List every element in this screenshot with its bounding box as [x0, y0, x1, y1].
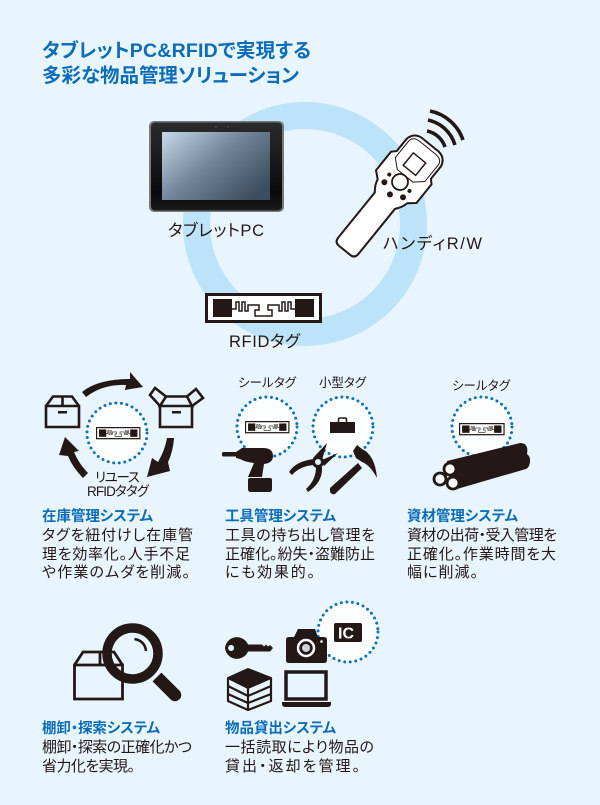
description: 理を効率化。人手不足	[42, 546, 190, 563]
description: 正確化。紛失・盗難防止	[225, 546, 375, 563]
description: 貸出・返却を管理。	[225, 757, 360, 775]
description	[225, 739, 374, 775]
small RFID tag	[246, 422, 289, 433]
tag circle	[87, 403, 147, 463]
icon: hammer	[330, 445, 377, 494]
label: seal tag: シールタグ	[452, 379, 510, 393]
tag circle	[452, 397, 512, 457]
icon: pipes	[434, 443, 530, 489]
heading: 棚卸・探索システム	[42, 719, 160, 737]
icon: key	[225, 637, 273, 659]
description	[42, 526, 193, 581]
icon: small tag case	[330, 418, 355, 433]
icon: RFID tag	[206, 294, 320, 322]
icon: handheld reader	[324, 111, 463, 267]
label: reuse tag: リユース	[95, 470, 140, 485]
description: 一括読取により物品の	[225, 739, 374, 756]
description: 幅に削減。	[407, 564, 478, 581]
description	[407, 526, 557, 581]
icon: pliers	[289, 443, 338, 492]
title	[42, 39, 311, 87]
description: タグを紐付けし在庫管	[42, 526, 193, 544]
panel: inventory management	[42, 372, 203, 581]
small RFID tag	[97, 428, 140, 439]
label: small tag: 小型タグ	[319, 376, 366, 390]
panel: item lending	[225, 602, 378, 775]
title: 多彩な物品管理ソリューション	[42, 64, 299, 87]
label: RFID tag: RFIDタグ	[229, 332, 301, 351]
ring behind devices	[196, 116, 414, 332]
icon: magnifier	[107, 628, 181, 701]
icon: tablet PC	[149, 121, 284, 212]
heading: 工具管理システム	[225, 507, 336, 525]
icon: IC badge	[334, 623, 362, 642]
heading: 在庫管理システム	[42, 507, 153, 525]
arrow: right	[147, 438, 174, 477]
icon: books	[228, 669, 271, 710]
panel: material management	[407, 379, 557, 581]
label: tablet PC: タブレットPC	[168, 220, 264, 240]
description	[42, 739, 192, 775]
description: 工具の持ち出し管理を	[225, 526, 375, 544]
panel: tool management	[222, 376, 377, 581]
icon: camera	[286, 629, 327, 663]
heading: 資材管理システム	[407, 507, 518, 525]
arrow: top	[82, 372, 143, 397]
reader body	[324, 128, 450, 267]
icon: laptop	[282, 672, 331, 707]
icon: open box	[150, 388, 203, 427]
tag circle	[313, 397, 373, 457]
description	[225, 526, 375, 581]
panel: inventory search	[42, 628, 192, 775]
arrow: left	[59, 437, 88, 478]
icon: closed box	[46, 396, 79, 427]
icon: IC badge: IC	[338, 626, 354, 642]
description: 棚卸・探索の正確化かつ	[42, 739, 192, 756]
icon: box	[74, 652, 122, 699]
tag circle	[237, 397, 297, 457]
description: 省力化を実現。	[42, 758, 135, 775]
title: タブレットPC&RFIDで実現する	[42, 39, 311, 62]
small RFID tag	[460, 424, 504, 435]
label: handheld reader: ハンディR/W	[383, 233, 482, 253]
description: や作業のムダを削減。	[42, 564, 190, 581]
heading: 物品貸出システム	[225, 719, 336, 737]
description: にも効果的。	[225, 564, 315, 581]
icon: radio waves	[427, 111, 463, 147]
description: 資材の出荷・受入管理を	[407, 526, 557, 544]
panel: inventory management: RFIDタタグ	[87, 484, 150, 499]
label: seal tag: シールタグ	[238, 376, 296, 390]
tag circle	[318, 602, 378, 662]
icon: drill	[222, 448, 273, 492]
description: 正確化。作業時間を大	[407, 546, 556, 563]
